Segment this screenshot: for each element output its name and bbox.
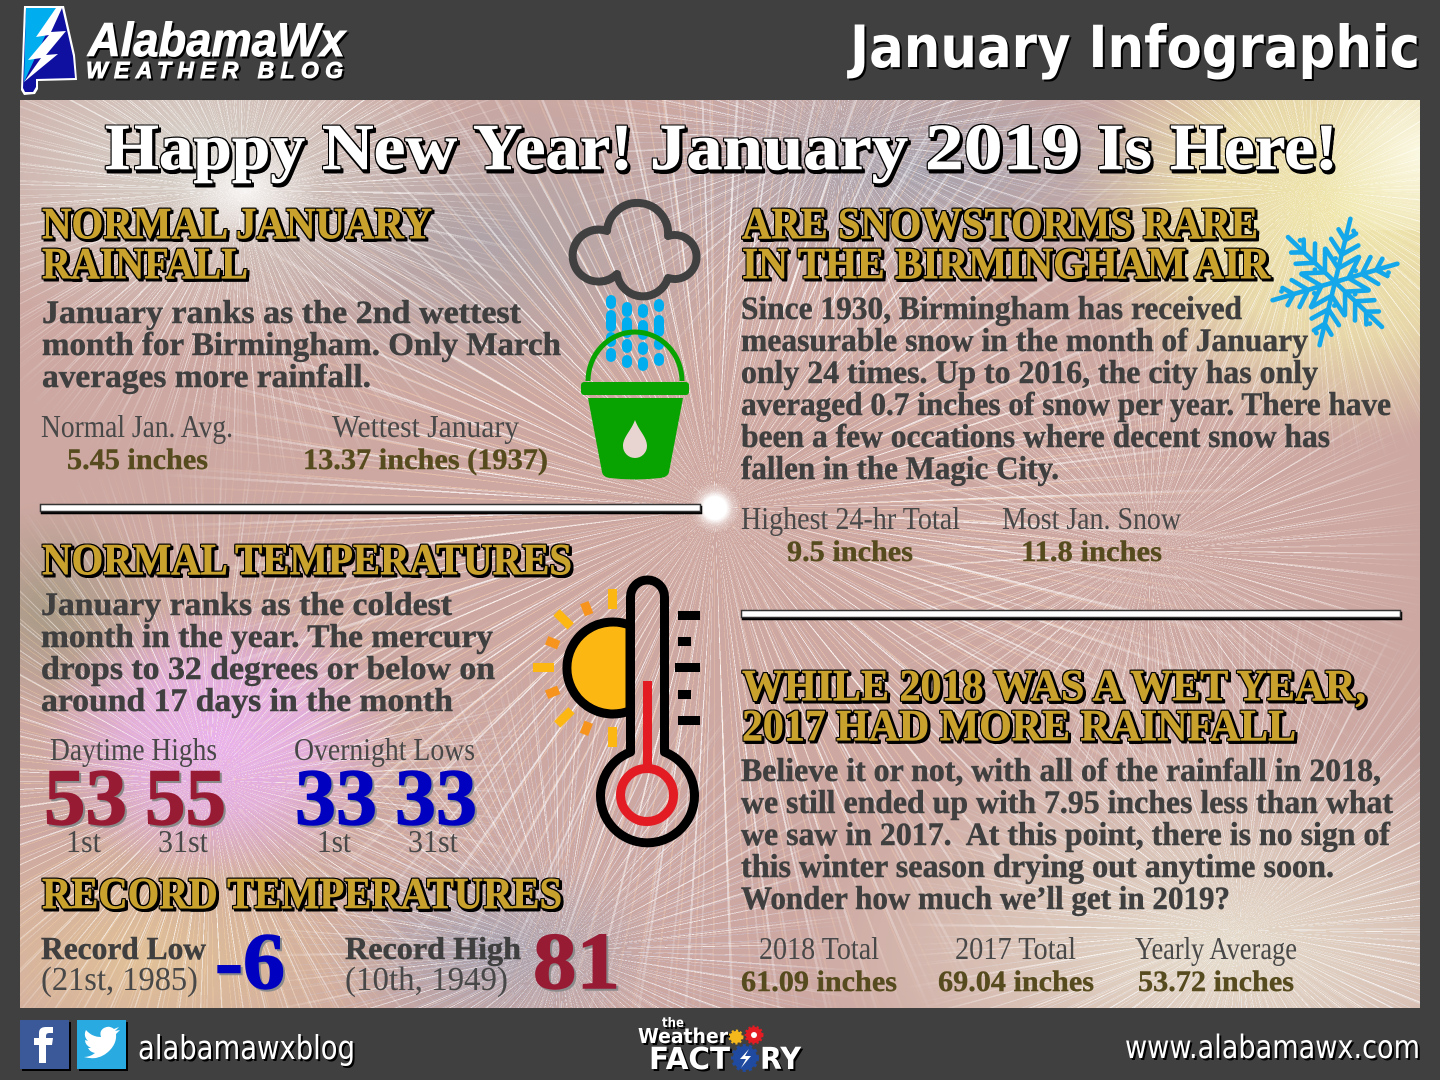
temperatures text: around 17 days in the month <box>41 683 453 719</box>
rainfall text: month for Birmingham. Only March <box>42 327 561 363</box>
stat: most January snow: 11.8 inches <box>1021 535 1162 568</box>
icon: twitter <box>77 1020 126 1069</box>
snowstorms text: been a few occations where decent snow has <box>741 419 1330 455</box>
temperatures text: drops to 32 degrees or below on <box>41 651 495 687</box>
icon: sun and thermometer <box>533 580 700 843</box>
heading: snowstorms: IN THE BIRMINGHAM AIR <box>742 239 1271 288</box>
stat: daytime highs <box>44 731 226 859</box>
icon: facebook <box>20 1020 69 1069</box>
snowstorms text: only 24 times. Up to 2016, the city has only <box>741 355 1318 391</box>
stat: daytime highs: Daytime Highs <box>50 731 217 767</box>
stat: record high: Record High <box>345 930 521 966</box>
heading: rainfall: RAINFALL <box>42 239 248 288</box>
main title <box>105 111 1338 184</box>
stat: daytime highs: 53 <box>44 754 127 842</box>
snowstorms text: measurable snow in the month of January <box>741 323 1308 359</box>
stat: 2017 total: 69.04 inches <box>938 965 1094 998</box>
snowstorms text: Since 1930, Birmingham has received <box>741 291 1242 327</box>
heading: snowstorms <box>742 199 1271 288</box>
heading: wet year: WHILE 2018 WAS A WET YEAR, <box>742 661 1366 710</box>
stat: record low: Record Low <box>41 930 206 966</box>
main title: Is <box>1097 111 1152 184</box>
main title: Happy <box>105 111 305 184</box>
stat: daytime highs: 55 <box>145 754 226 842</box>
stat: highest 24-hr total: 9.5 inches <box>787 535 913 568</box>
divider left <box>40 504 700 512</box>
stat: 2018 total <box>741 930 897 998</box>
stat: overnight lows: 33 <box>395 754 477 842</box>
icon: snowflake <box>1268 215 1402 349</box>
stat: 2017 total <box>938 930 1094 998</box>
stat: overnight lows: 31st <box>408 823 458 859</box>
stat: 2018 total: 61.09 inches <box>741 965 897 998</box>
snowstorms text: averaged 0.7 inches of snow per year. There have <box>741 387 1391 423</box>
wet year text: Wonder how much we’ll get in 2019? <box>741 881 1230 917</box>
stat: record low: -6 <box>215 918 285 1006</box>
stat: wettest January: 13.37 inches (1937) <box>303 443 548 476</box>
stat: overnight lows: Overnight Lows <box>294 731 475 767</box>
stat: overnight lows <box>294 731 477 859</box>
footer social <box>20 1020 355 1069</box>
stat: yearly average <box>1135 930 1297 998</box>
panel: normal January rainfall <box>41 199 697 480</box>
stat: most January snow <box>1002 500 1181 568</box>
stat: normal January average: Normal Jan. Avg. <box>41 408 233 444</box>
wet year text: we saw in 2017. At this point, there is no sign of <box>741 817 1391 853</box>
wet year text: we still ended up with 7.95 inches less than what <box>741 785 1393 821</box>
icon: rain cloud and bucket <box>573 203 697 480</box>
temperatures text: month in the year. The mercury <box>41 619 493 655</box>
Weather Factory logo: the <box>662 1016 684 1031</box>
temperatures text: January ranks as the coldest <box>41 587 452 623</box>
heading: rainfall <box>42 199 432 288</box>
stat: overnight lows: 1st <box>317 823 351 859</box>
main title: Year! <box>473 111 633 184</box>
main title: 2019 <box>925 111 1080 184</box>
logo wordmark: AlabamaWx <box>87 13 347 66</box>
stat: yearly average: Yearly Average <box>1135 930 1297 966</box>
stat: highest 24-hr total <box>741 500 960 568</box>
divider right <box>742 610 1400 618</box>
stat: record high: (10th, 1949) <box>345 961 508 998</box>
heading: record temperatures: RECORD TEMPERATURES <box>42 869 562 918</box>
temperatures text <box>41 587 495 719</box>
stat: daytime highs: 31st <box>158 823 208 859</box>
snowstorms text: fallen in the Magic City. <box>741 451 1059 487</box>
panel: record temperatures <box>41 869 620 1006</box>
stat: most January snow: Most Jan. Snow <box>1002 500 1181 536</box>
main title: New <box>322 111 457 184</box>
Weather Factory logo: RY <box>760 1042 802 1077</box>
stat: record high: 81 <box>533 918 620 1006</box>
Weather Factory logo <box>638 1016 802 1077</box>
header logo: AlabamaWx Weather Blog <box>21 6 347 95</box>
main title: January <box>650 111 908 184</box>
stat: record low <box>41 918 285 1006</box>
wet year text <box>741 753 1393 917</box>
stat: normal January average <box>41 408 233 476</box>
heading: snowstorms: ARE SNOWSTORMS RARE <box>742 199 1258 248</box>
heading: rainfall: NORMAL JANUARY <box>42 199 432 248</box>
panel: 2018 vs 2017 rainfall <box>741 661 1393 998</box>
stat: overnight lows: 33 <box>295 754 377 842</box>
stat: normal January average: 5.45 inches <box>67 443 208 476</box>
Weather Factory logo: FACT <box>649 1042 731 1077</box>
snowstorms text <box>741 291 1391 487</box>
wet year text: this winter season drying out anytime soon. <box>741 849 1334 885</box>
heading: temperatures: NORMAL TEMPERATURES <box>42 535 572 584</box>
stat: highest 24-hr total: Highest 24-hr Total <box>741 500 960 536</box>
rainfall text: averages more rainfall. <box>42 359 371 395</box>
stat: wettest January: Wettest January <box>332 408 519 444</box>
wet year text: Believe it or not, with all of the rainfall in 2018, <box>741 753 1381 789</box>
stat: yearly average: 53.72 inches <box>1138 965 1294 998</box>
heading: wet year: 2017 HAD MORE RAINFALL <box>742 701 1296 750</box>
icon: Alabama state lightning <box>21 6 77 95</box>
heading: wet year <box>742 661 1366 750</box>
main title: Here! <box>1170 111 1338 184</box>
stat: wettest January <box>303 408 548 476</box>
panel: snowstorms <box>741 199 1402 568</box>
Weather Factory logo: Weather <box>638 1024 728 1048</box>
stat: record high <box>345 918 620 1006</box>
logo subtitle: WEATHER BLOG <box>86 57 343 83</box>
stat: 2017 total: 2017 Total <box>955 930 1076 966</box>
rainfall text <box>42 295 561 395</box>
stat: record low: (21st, 1985) <box>41 961 198 998</box>
social handle: alabamawxblog <box>138 1028 355 1067</box>
panel: normal temperatures <box>41 535 700 859</box>
rainfall text: January ranks as the 2nd wettest <box>42 295 521 331</box>
stat: daytime highs: 1st <box>66 823 101 859</box>
stat: 2018 total: 2018 Total <box>759 930 879 966</box>
